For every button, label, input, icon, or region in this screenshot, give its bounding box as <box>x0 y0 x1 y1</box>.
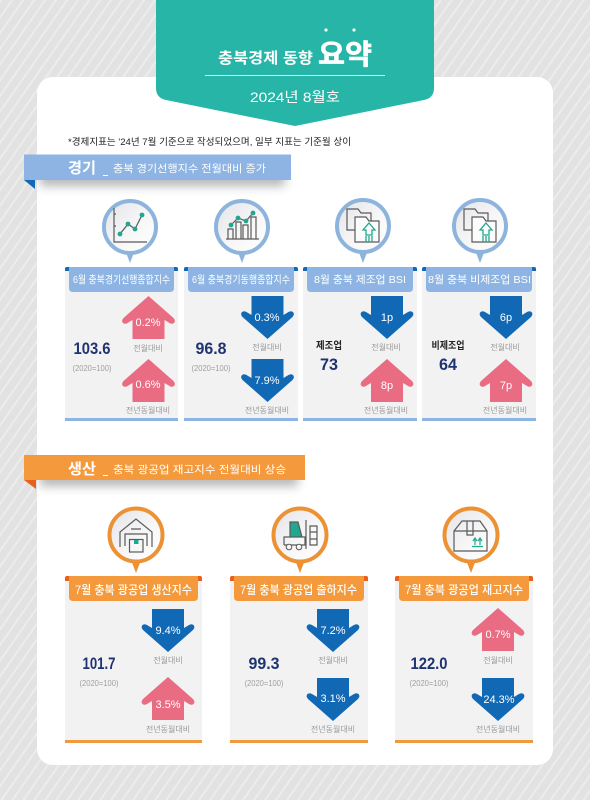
arrow: down 0.3%: 0.3% <box>254 312 280 324</box>
arrow: down 7.2%: 7.2% <box>320 625 346 637</box>
value <box>410 654 449 688</box>
card: 경기선행종합지수 <box>65 201 178 421</box>
section banner: 경기: 충북 경기선행지수 전월대비 증가 <box>113 162 266 175</box>
value: (2020=100) <box>80 679 119 688</box>
header badge <box>156 0 434 126</box>
value: (2020=100) <box>192 364 231 373</box>
arrow: down 0.3%: 전월대비 <box>252 342 282 352</box>
arrow: up 0.6%: 0.6% <box>135 379 161 391</box>
card: 제조업 BSI <box>303 200 417 421</box>
value <box>244 654 284 688</box>
arrow: down 6p: 6p <box>500 312 512 324</box>
title: 충북경제 동향 <box>218 50 313 67</box>
arrow: up 3.5% <box>142 677 194 734</box>
icon: folder pin <box>337 200 389 263</box>
icon: box pin <box>444 508 498 573</box>
arrow: down 6p: 전월대비 <box>490 342 520 352</box>
card heading: 6월 충북경기동행종합지수 <box>192 273 290 286</box>
arrow: up 0.7%: 0.7% <box>485 629 511 641</box>
arrow: up 0.7%: 전월대비 <box>483 655 513 665</box>
value <box>72 339 112 373</box>
card heading: 8월 충북 비제조업 BSI <box>428 273 531 286</box>
arrow: down 3.1%: 전년동월대비 <box>311 724 355 734</box>
arrow: down 7.9% <box>241 359 294 415</box>
arrow: up 7p: 전년동월대비 <box>483 405 527 415</box>
arrow: down 1p <box>361 296 413 352</box>
arrow: up 0.2%: 0.2% <box>135 317 161 329</box>
value <box>316 339 342 374</box>
arrow: down 0.3% <box>241 296 294 352</box>
arrow: up 8p <box>361 359 413 415</box>
arrow: up 3.5%: 3.5% <box>155 699 181 711</box>
value: 103.6 <box>74 339 110 358</box>
arrow: up 0.6%: 전년동월대비 <box>126 405 170 415</box>
arrow: down 7.2% <box>307 609 359 665</box>
arrow: up 3.5%: 전년동월대비 <box>146 724 190 734</box>
value <box>432 339 464 374</box>
arrow: down 3.1% <box>307 678 359 734</box>
section banner: 경기: 경기 <box>68 160 96 177</box>
arrow: down 9.4% <box>142 609 194 665</box>
card: 광공업 재고지수 <box>395 508 533 743</box>
section banner: 경기 <box>24 154 291 189</box>
card: 광공업 생산지수 <box>65 508 202 743</box>
arrow: down 7.9%: 7.9% <box>254 375 280 387</box>
value: 122.0 <box>410 654 448 673</box>
card heading: 7월 충북 광공업 재고지수 <box>405 582 523 597</box>
value: (2020=100) <box>410 679 449 688</box>
icon: forklift pin <box>274 508 326 573</box>
arrow: down 7.9%: 전년동월대비 <box>245 405 289 415</box>
value: (2020=100) <box>72 364 112 373</box>
value: 비제조업 <box>432 339 464 352</box>
value: 64 <box>439 355 458 374</box>
card heading: 7월 충북 광공업 출하지수 <box>240 583 357 597</box>
title: 요약 <box>318 39 372 70</box>
card heading: 6월 충북경기선행종합지수 <box>73 273 170 286</box>
arrow: down 7.2%: 전월대비 <box>318 655 348 665</box>
icon: warehouse pin <box>110 508 162 573</box>
value <box>80 654 119 688</box>
arrow: up 8p: 8p <box>381 380 393 392</box>
issue date: 2024년 8월호 <box>250 89 340 105</box>
card: 광공업 출하지수 <box>230 508 368 743</box>
arrow: down 9.4%: 9.4% <box>155 625 181 637</box>
value: 제조업 <box>316 339 342 352</box>
section banner: 생산: 충북 광공업 재고지수 전월대비 상승 <box>113 463 286 476</box>
value: 73 <box>320 355 338 374</box>
arrow: up 8p: 전년동월대비 <box>364 405 408 415</box>
icon: line chart pin <box>104 201 156 263</box>
title <box>218 28 372 70</box>
value: 96.8 <box>196 339 226 358</box>
value: 99.3 <box>248 654 280 673</box>
icon: bar chart pin <box>216 201 268 263</box>
arrow: up 0.2% <box>122 296 175 353</box>
white content panel <box>37 77 553 765</box>
arrow: up 0.6% <box>122 359 175 415</box>
value: 101.7 <box>82 654 116 673</box>
value <box>192 339 231 373</box>
arrow: up 0.2%: 전월대비 <box>133 343 163 353</box>
card heading: 8월 충북 제조업 BSI <box>314 273 406 286</box>
section banner: 생산: 생산 <box>68 461 96 478</box>
arrow: down 1p: 전월대비 <box>371 342 401 352</box>
arrow: up 7p <box>480 359 532 415</box>
arrow: down 24.3%: 24.3% <box>483 694 515 706</box>
footnote: *경제지표는 '24년 7월 기준으로 작성되었으며, 일부 지표는 기준월 상이 <box>68 136 351 148</box>
arrow: up 0.7% <box>472 608 524 665</box>
card heading: 7월 충북 광공업 생산지수 <box>75 583 192 597</box>
arrow: down 3.1%: 3.1% <box>320 693 346 705</box>
card: 경기동행종합지수 <box>184 201 298 421</box>
arrow: down 24.3% <box>472 678 524 734</box>
section banner: 생산 <box>24 455 305 489</box>
arrow: up 7p: 7p <box>500 380 512 392</box>
arrow: down 1p: 1p <box>381 312 393 324</box>
arrow: down 24.3%: 전년동월대비 <box>476 724 520 734</box>
value: (2020=100) <box>244 679 284 688</box>
card: 비제조업 BSI <box>422 200 536 421</box>
arrow: down 9.4%: 전월대비 <box>153 655 183 665</box>
arrow: down 6p <box>480 296 532 352</box>
icon: folder pin <box>454 200 506 263</box>
